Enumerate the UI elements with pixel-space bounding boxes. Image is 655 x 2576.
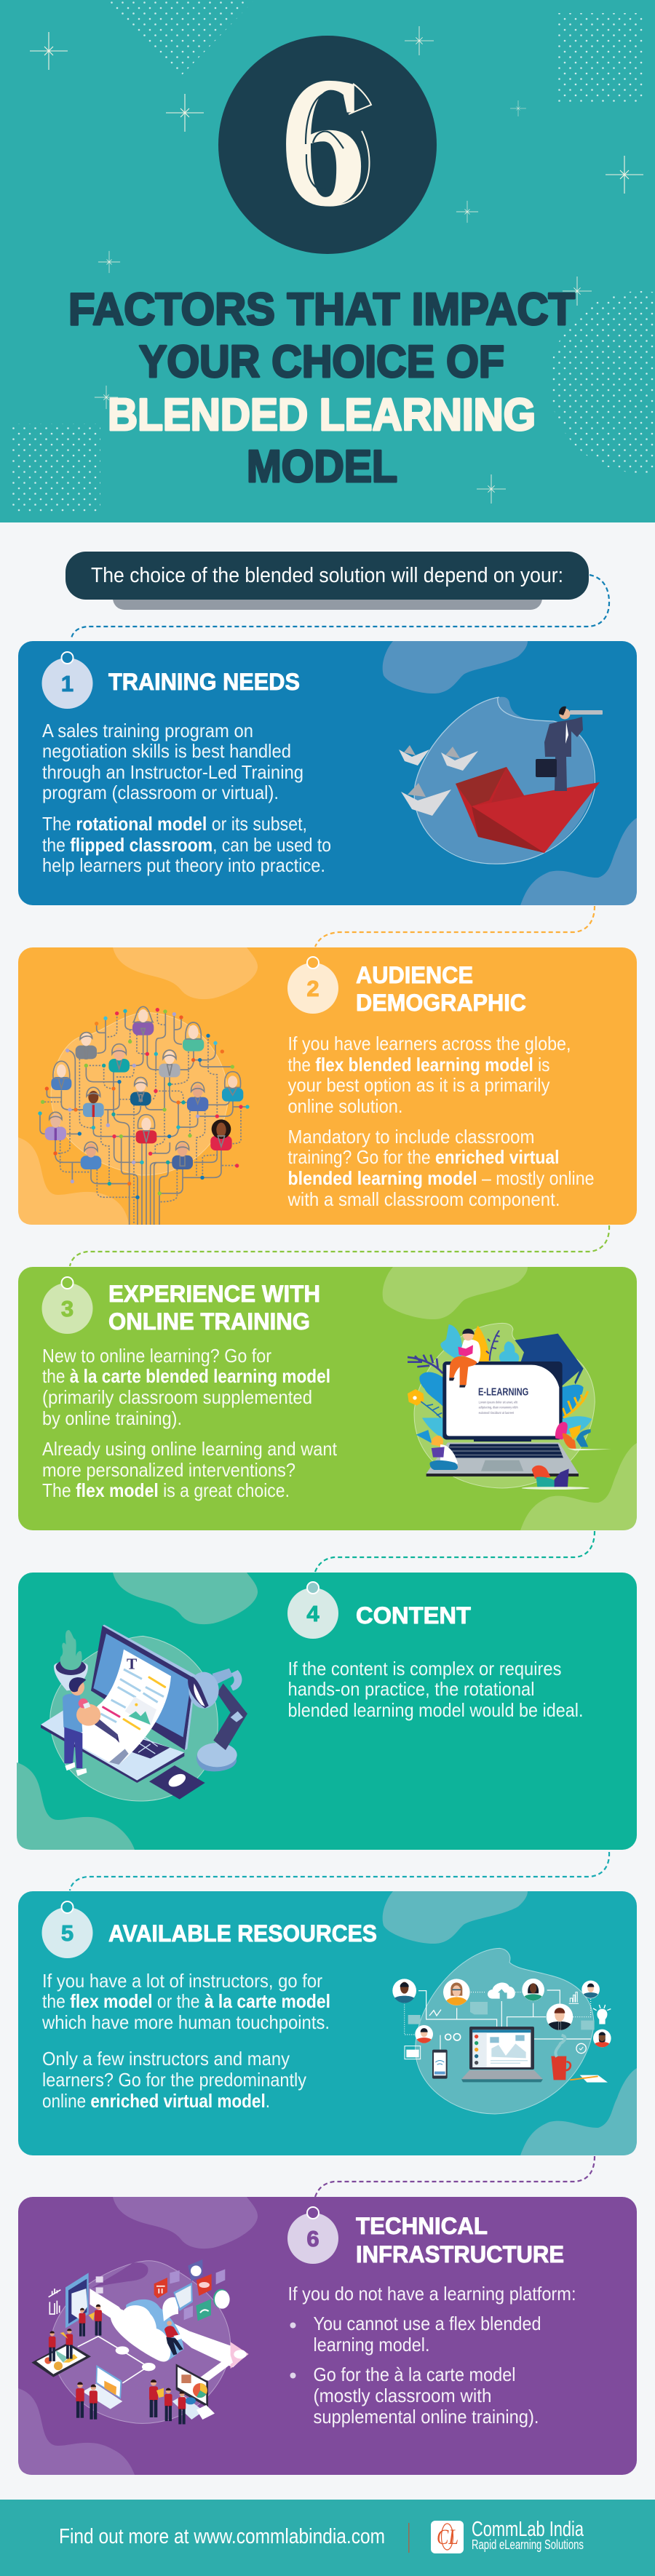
dot pattern: top triangle — [108, 0, 255, 76]
screen text: E-LEARNING — [478, 1386, 528, 1398]
title: YOUR CHOICE OF — [139, 337, 504, 387]
badge: 6 — [287, 2207, 338, 2264]
intro pill: The choice of the blended solution will depend on your: — [91, 564, 563, 587]
body text: available resources — [41, 1970, 330, 2112]
panel: content — [17, 1573, 637, 1850]
body text: content: If the content is complex or requires — [288, 1658, 562, 1679]
heading: technical infrastructure — [356, 2213, 564, 2267]
body text: training needs: negotiation skills is best handled — [42, 740, 291, 762]
connector: pill to card 1 — [71, 575, 609, 638]
screen text — [478, 1386, 528, 1415]
intro pill — [66, 552, 589, 610]
body text: available resources: which have more human touchpoints. — [41, 2011, 330, 2033]
connector: card 3 to card 4 — [315, 1531, 595, 1572]
connector: card 2 to card 3 — [70, 1225, 609, 1266]
header background — [0, 0, 655, 522]
heading: audience demographic: AUDIENCE — [356, 962, 473, 988]
body text: audience demographic: with a small classroom component. — [287, 1188, 560, 1210]
body text: training needs: the flipped classroom, can be used to — [42, 834, 331, 856]
heading: technical infrastructure: INFRASTRUCTURE — [356, 2241, 564, 2267]
badge: 1 — [42, 652, 93, 709]
body text: audience demographic: training? Go for the enriched virtual — [288, 1146, 559, 1168]
body text: experience with online training: the à la carte blended learning model — [42, 1365, 330, 1387]
illustration: laptop and lamp: T — [127, 1655, 137, 1672]
body text: training needs: through an Instructor-Led Training — [42, 761, 303, 783]
panel: experience with online training — [18, 1267, 637, 1530]
body text: audience demographic: If you have learners across the globe, — [288, 1033, 571, 1054]
brand name: Rapid eLearning Solutions — [472, 2537, 584, 2552]
panel: available resources — [18, 1891, 637, 2155]
body text: content: blended learning model would be ideal. — [288, 1699, 584, 1721]
body text: audience demographic: the flex blended learning model is — [288, 1054, 550, 1076]
footer call to action: Find out more at www.commlabindia.com — [59, 2525, 385, 2548]
heading: technical infrastructure: TECHNICAL — [356, 2213, 488, 2239]
big number circle — [218, 36, 437, 254]
brand name — [472, 2518, 584, 2552]
sparkle stars — [30, 26, 643, 504]
body text: experience with online training: by online training). — [42, 1407, 182, 1429]
brand name: CommLab India — [472, 2518, 584, 2541]
badge: 3 — [42, 1277, 93, 1334]
body text: technical infrastructure: learning model. — [313, 2334, 429, 2356]
body text: available resources: Only a few instructors and many — [42, 2048, 290, 2070]
badge: 3: 3 — [61, 1296, 74, 1321]
seated figure — [164, 2321, 184, 2356]
heading: audience demographic: DEMOGRAPHIC — [356, 990, 526, 1016]
illustration: laptop and lamp — [41, 1625, 247, 1801]
body text: experience with online training — [42, 1345, 338, 1501]
body text: training needs: help learners put theory into practice. — [42, 854, 325, 876]
heading: training needs: TRAINING NEEDS — [108, 669, 300, 695]
body text: training needs: A sales training program on — [42, 720, 253, 742]
body text: audience demographic — [287, 1033, 595, 1210]
body text: experience with online training: New to online learning? Go for — [42, 1345, 271, 1367]
badge: 5 — [42, 1901, 93, 1958]
badge: 4: 4 — [306, 1601, 319, 1626]
badge: 2 — [287, 957, 338, 1014]
body text: technical infrastructure — [288, 2283, 576, 2428]
logo — [431, 2521, 464, 2553]
badge: 4 — [287, 1582, 338, 1639]
body text: technical infrastructure: supplemental online training). — [313, 2406, 539, 2428]
heading: content: CONTENT — [356, 1602, 471, 1629]
heading: available resources: AVAILABLE RESOURCES — [108, 1920, 377, 1947]
illustration: people tree — [38, 1006, 250, 1225]
body text: technical infrastructure: Go for the à la carte model — [313, 2364, 515, 2385]
badge: 1: 1 — [61, 671, 74, 696]
panel: training needs — [18, 641, 637, 905]
body text: content: hands-on practice, the rotational — [288, 1678, 534, 1700]
illustration: cloud infrastructure — [31, 2259, 249, 2424]
body text: available resources: If you have a lot of instructors, go for — [42, 1970, 322, 1992]
body text: available resources: online enriched virtual model. — [42, 2090, 270, 2112]
screen text: euismod tincidunt ut laoreet — [479, 1411, 514, 1415]
panel: audience demographic — [18, 947, 637, 1225]
heading: experience with online training: EXPERIENCE WITH — [108, 1281, 320, 1307]
connector: card 5 to card 6 — [315, 2156, 595, 2197]
body text: audience demographic: online solution. — [288, 1095, 403, 1117]
big number circle: 6 — [280, 38, 366, 245]
body text: experience with online training: The flex model is a great choice. — [42, 1479, 290, 1501]
body text: experience with online training: Already using online learning and want — [42, 1438, 338, 1460]
body text: training needs: The rotational model or its subset, — [42, 813, 307, 835]
body text: audience demographic: your best option as it is a primarily — [288, 1074, 550, 1096]
logo: CL — [437, 2525, 458, 2549]
footer bar — [0, 2500, 655, 2576]
badge: 2: 2 — [306, 976, 319, 1001]
body text: available resources: learners? Go for the predominantly — [42, 2069, 306, 2091]
illustration: e-learning laptop — [408, 1323, 611, 1490]
title: FACTORS THAT IMPACT — [68, 285, 575, 335]
connector: card 1 to card 2 — [315, 906, 595, 947]
dot pattern: top right square — [555, 13, 643, 102]
title: MODEL — [247, 442, 397, 492]
body text: audience demographic: Mandatory to include classroom — [288, 1126, 534, 1148]
dot pattern: right circle — [549, 291, 655, 473]
body text: training needs — [42, 720, 331, 876]
badge: 5: 5 — [61, 1920, 74, 1946]
heading: audience demographic — [356, 962, 526, 1016]
body text: technical infrastructure: (mostly classroom with — [313, 2385, 492, 2406]
body text: experience with online training: (primarily classroom supplemented — [42, 1386, 312, 1408]
dot pattern: bottom left square — [12, 424, 100, 512]
screen text: Lorem ipsum dolor sit amet, elit — [479, 1401, 517, 1404]
title: BLENDED LEARNING — [108, 390, 536, 440]
badge: 6: 6 — [306, 2226, 319, 2251]
body text: content — [288, 1658, 584, 1721]
body text: available resources: the flex model or the à la carte model — [42, 1990, 330, 2012]
illustration: paper boat and businessman — [399, 697, 603, 864]
body text: training needs: program (classroom or virtual). — [42, 782, 279, 803]
body text: experience with online training: more personalized interventions? — [42, 1459, 295, 1481]
panel: technical infrastructure — [18, 2197, 637, 2475]
illustration: network of people around laptop — [392, 1948, 611, 2114]
body text: technical infrastructure: If you do not have a learning platform: — [288, 2283, 576, 2305]
title — [68, 285, 575, 492]
heading: experience with online training — [108, 1281, 320, 1335]
connector: card 4 to card 5 — [70, 1852, 609, 1891]
heading: experience with online training: ONLINE TRAINING — [108, 1308, 310, 1335]
body text: technical infrastructure: You cannot use a flex blended — [313, 2313, 541, 2334]
body text: audience demographic: blended learning model – mostly online — [288, 1167, 595, 1189]
screen text: adipiscing, diam nonummy nibh — [479, 1406, 518, 1410]
